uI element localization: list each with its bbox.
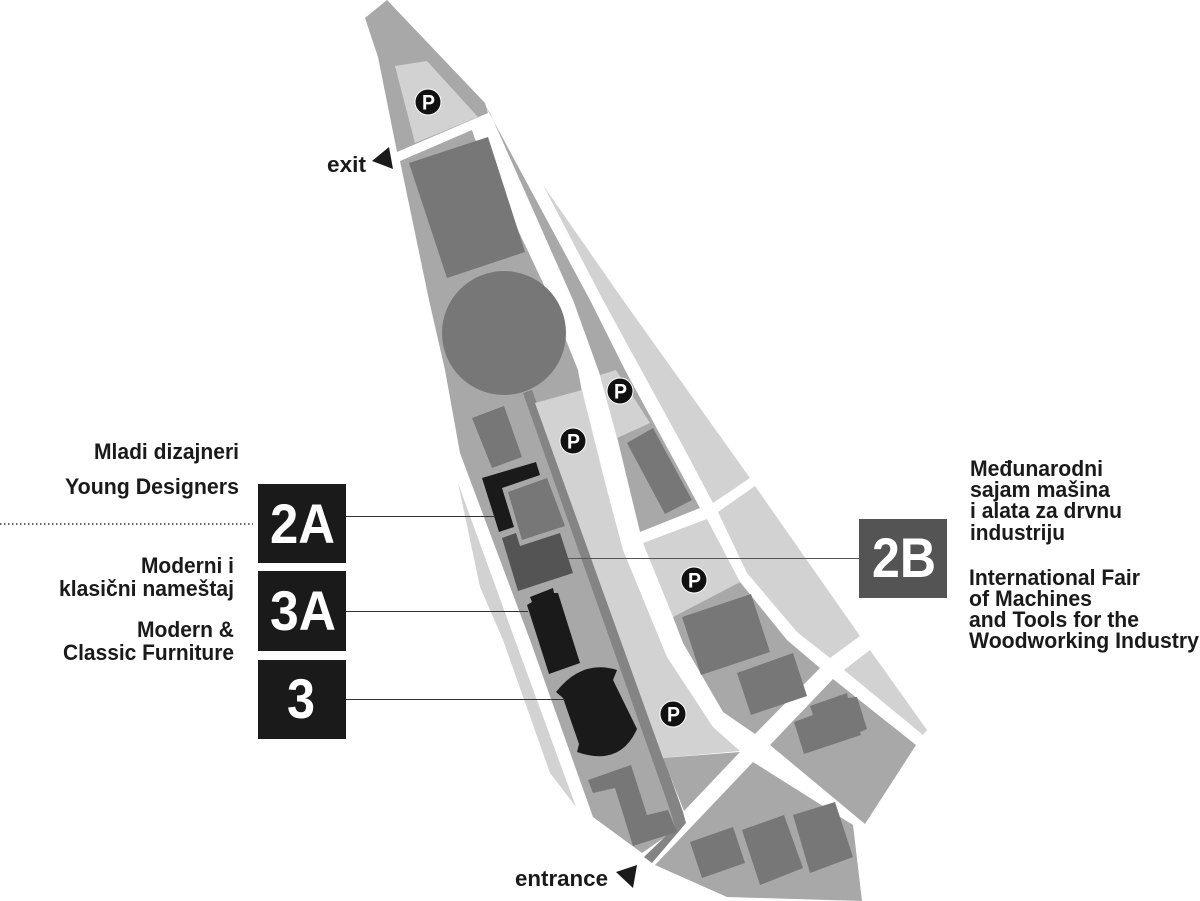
main west block [400, 130, 683, 853]
leader line 2B [567, 558, 859, 560]
south building 2 [742, 815, 803, 885]
furniture text: Modern & [137, 617, 234, 642]
south building 1 [690, 827, 745, 878]
south building 3 [793, 802, 853, 873]
map [365, 0, 927, 901]
narrow east wedge [485, 105, 700, 532]
young designers text: Young Designers [65, 474, 239, 499]
dotted line [0, 523, 253, 525]
woodworking fair text [969, 456, 1199, 653]
parking icon central [560, 428, 586, 454]
label box 2A: 2A [270, 492, 335, 555]
hall 2B [502, 533, 573, 591]
wedge parking area [600, 370, 650, 438]
label box 3A [258, 571, 346, 651]
parking icon wedge [607, 378, 633, 404]
woodworking fair text: and Tools for the [969, 607, 1139, 632]
label box 2A [258, 484, 346, 563]
east building small [737, 653, 807, 715]
furniture text: klasični nameštaj [59, 576, 234, 601]
entrance label: entrance [515, 866, 608, 891]
L-shaped building [588, 765, 677, 846]
central parking area [535, 390, 740, 758]
furniture text: Moderni i [141, 553, 234, 578]
woodworking fair text: International Fair [969, 565, 1140, 590]
woodworking fair text: i alata za drvnu [970, 498, 1122, 523]
south block [655, 762, 862, 901]
parking icon north [415, 89, 441, 115]
central dark strip [523, 390, 686, 863]
woodworking fair text: industriju [970, 520, 1065, 545]
parking icon south: P [667, 704, 680, 726]
far east light block [543, 185, 750, 503]
east light block [718, 486, 860, 658]
parking icon north: P [422, 92, 435, 114]
east parking area [643, 519, 740, 617]
entrance arrow [616, 865, 637, 888]
north parking area [395, 61, 478, 143]
east building large [682, 594, 770, 675]
hall 3 [556, 667, 637, 756]
label box 2B [859, 519, 947, 598]
label box 3: 3 [287, 667, 315, 730]
exit label: exit [327, 152, 367, 177]
corner triangle [844, 650, 927, 735]
east building block [673, 582, 820, 734]
parking icon east [681, 567, 707, 593]
hall 2A [482, 462, 540, 532]
building beside 2A [508, 478, 565, 540]
hall 3A [527, 588, 580, 674]
far west light strip [458, 483, 576, 807]
parking icon central: P [567, 430, 580, 454]
label box 3 [258, 660, 346, 739]
wedge building [627, 428, 692, 514]
leader line 3 [346, 698, 565, 700]
woodworking fair text: sajam mašina [970, 477, 1110, 502]
label box 2B: 2B [872, 526, 936, 589]
woodworking fair text: Međunarodni [970, 456, 1103, 481]
leader line 3A [346, 610, 528, 612]
large north hall [409, 137, 525, 278]
south-east block [770, 679, 916, 824]
small building [472, 406, 522, 468]
young designers text: Mladi dizajneri [94, 439, 239, 464]
leader line 2A [346, 516, 495, 518]
label box 3A: 3A [270, 579, 336, 642]
furniture text: Classic Furniture [63, 640, 234, 665]
young designers text [65, 439, 239, 499]
parking icon wedge: P [614, 380, 627, 404]
triangle south of parking [663, 752, 740, 811]
woodworking fair text: of Machines [969, 586, 1092, 611]
round hall [442, 271, 566, 395]
parking icon east: P [688, 570, 701, 592]
exit arrow [372, 147, 393, 169]
parking icon south [660, 701, 686, 727]
north block [365, 0, 488, 152]
furniture text [59, 553, 234, 665]
south-east building [794, 693, 867, 754]
